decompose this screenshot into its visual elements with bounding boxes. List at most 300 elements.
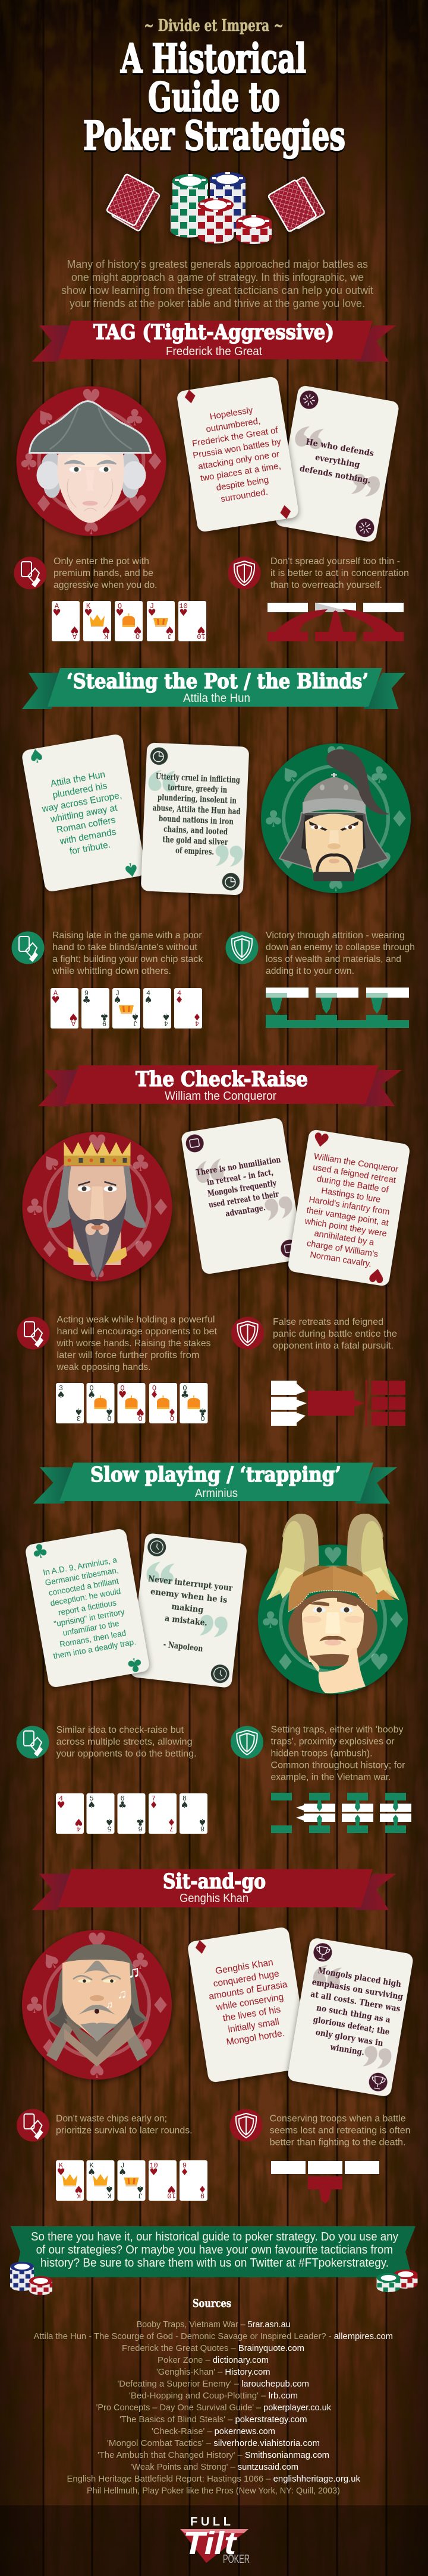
quote text: abuse, Attila the Hun had — [152, 803, 241, 817]
fact text — [37, 767, 131, 860]
poker hand: straight: 7 — [169, 1824, 174, 1833]
sources list: Poker Zone – dictionary.com — [158, 2355, 269, 2365]
tip text: stealing poker: a fight; building your own chip stack — [52, 954, 203, 964]
logo: Full Tilt Poker: Tilt — [183, 2526, 237, 2561]
poker hand: weak hand: A — [54, 989, 58, 998]
fact card: Genghis: ♦ — [191, 1935, 211, 1960]
fact text: while conserving — [215, 1992, 284, 2013]
poker hand: weak hand: J — [133, 1019, 137, 1027]
icon: quotation marks — [287, 424, 388, 499]
poker hand: high cards: ♠ — [136, 2183, 144, 2195]
portrait: Frederick the Great — [17, 385, 166, 539]
poker hand: straight: 5 — [89, 1795, 94, 1803]
quote card: Attila — [141, 742, 249, 895]
portrait: Attila the Hun: ♠ — [326, 871, 346, 897]
poker hand: four queens: Q — [152, 1384, 156, 1393]
tip text: stealing battle: adding it to your own. — [266, 966, 354, 976]
poker hand: straight: 6 — [120, 1795, 125, 1803]
tip text: sit-and-go poker — [56, 2114, 193, 2135]
icon: shield — [231, 1726, 263, 1759]
sources list: 'Pro Concepts – Day One Survival Guide' – pokerplayer.co.uk — [96, 2403, 331, 2413]
sources list: 'Weak Points and Strong' – suntzusaid.com — [131, 2462, 298, 2472]
sources heading: Sources — [193, 2297, 231, 2310]
fact card: Attila — [20, 730, 147, 896]
portrait: William the Conqueror: ♦ — [39, 1236, 60, 1262]
poker hand: weak hand: ♦ — [193, 1011, 202, 1023]
icon: right chip stacks — [377, 2270, 417, 2292]
icon: hand of cards — [17, 1726, 49, 1759]
poker hand: four queens: Q — [170, 1414, 174, 1422]
poker hand: weak hand: ♥ — [51, 994, 60, 1005]
tip text: sit-and-go battle: better than fighting to the death. — [270, 2138, 406, 2147]
portrait: Frederick the Great: ♦ — [144, 449, 165, 475]
portrait: William the Conqueror: ♣ — [130, 1150, 151, 1176]
section: Sit-and-go, Genghis Khan — [17, 1869, 414, 2204]
poker hand: weak hand: 4 — [177, 989, 181, 998]
sources list: 'Mongol Combat Tactics' – silverhorde.viahistoria.com — [107, 2438, 320, 2448]
icon: musical notes: ♫ — [128, 1963, 140, 1981]
tip text: sit-and-go battle — [270, 2114, 411, 2147]
poker hand: four queens: Q — [200, 1414, 205, 1422]
icon: card return — [184, 1121, 300, 1271]
portrait: Arminius — [258, 1514, 408, 1694]
quote text: defends nothing. — [299, 464, 372, 486]
fact text: concocted a brilliant — [48, 1577, 119, 1597]
tip text: check-raise battle: opponent into a fatal pursuit. — [273, 1341, 394, 1351]
fact text: with demands — [59, 827, 117, 847]
icon: quotation marks — [194, 1148, 294, 1231]
fact text: them into a deadly trap. — [52, 1637, 137, 1661]
fact text: William the Conqueror — [313, 1152, 399, 1175]
icon: pie chart — [144, 747, 246, 891]
poker hand: straight: ♦ — [167, 1817, 176, 1828]
poker hand: weak hand: J — [115, 989, 119, 998]
poker hand: royal flush: ♥ — [84, 607, 93, 618]
fact card: Frederick: ♦ — [180, 384, 200, 409]
portrait: Frederick the Great: ♣ — [18, 449, 39, 475]
portrait: Attila the Hun — [261, 742, 411, 897]
poker hand: four queens: ♠ — [56, 1389, 65, 1400]
fact text: Norman cavalry. — [309, 1251, 372, 1270]
quote text: plundering, insolent in — [158, 793, 237, 806]
tip text: check-raise poker: weak opposing hands. — [56, 1362, 151, 1372]
poker hand: high cards: 10 — [149, 2162, 158, 2170]
fact text: Mongol horde. — [226, 2028, 285, 2047]
poker hand: royal flush: 10 — [179, 602, 188, 610]
portrait: William the Conqueror: ♦ — [150, 1194, 171, 1220]
poker hand: royal flush: ♥ — [52, 607, 61, 618]
poker hand: royal flush: K — [103, 632, 108, 640]
portrait: Frederick the Great: ♠ — [29, 401, 61, 434]
quote text: only glory was in — [315, 2028, 384, 2049]
poker hand: weak hand: ♠ — [144, 994, 153, 1005]
tip text: stealing poker: while whittling down others. — [52, 966, 171, 976]
icon: left playing cards — [106, 174, 160, 232]
fact text: unfamiliar to the — [62, 1619, 120, 1638]
poker hand: royal flush: ♥ — [115, 607, 124, 618]
intro text: show how learning from these great tacticians can help you outwit — [61, 284, 373, 296]
poker hand: high cards: ♥ — [74, 2183, 83, 2195]
portrait: Attila the Hun: ♣ — [263, 806, 284, 832]
icon: quotation marks — [140, 1561, 234, 1638]
quote text: Never interrupt your — [147, 1574, 234, 1593]
banner: Slow playing — [33, 1463, 397, 1504]
poker hand: royal flush: J — [150, 602, 154, 610]
fact text: Germanic tribesman, — [45, 1566, 119, 1587]
poker hand: royal flush — [52, 601, 206, 641]
sources list: 'Genghis-Khan' – History.com — [156, 2367, 270, 2377]
banner: The Check-Raise: The Check-Raise — [136, 1067, 308, 1091]
sources list: 'Defeating a Superior Enemy' – larouchepub.com — [117, 2379, 309, 2389]
section: TAG, Frederick the Great — [14, 320, 409, 641]
icon: hand of cards — [17, 2109, 49, 2141]
quote card: William — [181, 1117, 304, 1275]
fact text: way across Europe, — [40, 790, 122, 814]
poker hand: weak hand: 4 — [164, 1019, 168, 1027]
poker hand: four queens: Q — [138, 1414, 143, 1422]
battle diagram: attrition — [266, 988, 409, 1028]
poker hand: royal flush: ♥ — [133, 624, 142, 635]
portrait: Genghis Khan: ♣ — [130, 1948, 150, 1974]
portrait: Arminius: ♦ — [275, 1649, 295, 1675]
poker hand: straight: ♠ — [180, 1799, 189, 1811]
section: Stealing the Pot, Attila the Hun — [12, 668, 415, 1028]
quote text: chains, and looted — [163, 825, 228, 837]
fact text: Harold's infantry from — [308, 1195, 391, 1217]
poker hand: four queens: Q — [182, 1384, 187, 1393]
fact text: Hopelessly — [209, 405, 254, 422]
title: Guide to — [148, 74, 280, 121]
quote text: There is no humiliation — [196, 1155, 282, 1178]
poker hand: high cards: ♠ — [105, 2183, 114, 2195]
poker hand: four queens: Q — [120, 1384, 125, 1393]
fact text: the lives of his — [222, 2005, 282, 2024]
tip text: slow playing battle: Setting traps, either with 'booby — [271, 1724, 403, 1735]
sources list: Booby Traps, Vietnam War – 5rar.asn.au — [137, 2319, 291, 2330]
icon: quotation marks — [300, 1963, 405, 2071]
portrait: Frederick the Great: ♠ — [81, 513, 102, 539]
tip text: stealing poker: hand to take blinds/ante's without — [52, 942, 198, 952]
fact text — [204, 1956, 296, 2049]
fact text — [187, 401, 289, 508]
banner: TAG — [32, 320, 396, 362]
footer band — [0, 2505, 428, 2576]
poker hand: royal flush: Q — [118, 602, 122, 610]
tip text: check-raise poker: hand will encourage opponents to bet — [57, 1327, 218, 1337]
sources list: English Heritage Battlefield Report: Hastings 1066 – englishheritage.org.uk — [67, 2474, 360, 2484]
poker hand: four queens: ♣ — [181, 1389, 189, 1400]
quote text: emphasis on surviving — [311, 1977, 404, 2002]
poker hand: high cards: ♠ — [118, 2166, 127, 2178]
fact text: plundered his — [52, 781, 108, 800]
fact text: for tribute. — [69, 840, 111, 857]
portrait: Frederick the Great: ♥ — [127, 490, 148, 517]
icon: clock — [133, 1537, 244, 1684]
tip text: check-raise poker — [56, 1315, 218, 1372]
fact text: Frederick the Great of — [191, 425, 279, 449]
fact card: Attila: ♠ — [26, 743, 47, 769]
quote text: the gold and silver — [162, 835, 228, 847]
fact text: which point they were — [304, 1216, 388, 1239]
poker hand: straight: 8 — [182, 1795, 187, 1803]
poker hand: high cards: K — [107, 2191, 112, 2200]
poker hand: royal flush: ♥ — [197, 624, 206, 635]
portrait: Arminius: ♥ — [369, 1649, 389, 1675]
fact text: Hastings to lure — [320, 1186, 381, 1205]
icon: hand of cards — [12, 931, 44, 964]
fact text: deception: he would — [49, 1587, 121, 1608]
fact text: outnumbered, — [205, 416, 261, 435]
poker hand: straight: ♦ — [149, 1799, 158, 1811]
tip text: check-raise battle: panic during battle entice the — [273, 1329, 397, 1339]
banner: Stealing the Pot: Attila the Hun — [183, 692, 250, 705]
tip text: stealing battle: down an enemy to collapse through — [266, 942, 415, 952]
quote text — [301, 1966, 406, 2062]
tip text: TAG battle — [270, 556, 409, 590]
poker hand: high cards: 10 — [167, 2191, 176, 2200]
fact text: two places at a time, — [200, 461, 282, 483]
poker hand: weak hand: ♦ — [175, 994, 184, 1005]
portrait: Attila the Hun: ♥ — [326, 742, 346, 768]
fact card: Frederick: ♦ — [275, 499, 295, 524]
quote text: winning. — [329, 2043, 365, 2058]
fact card: Arminius: ♣ — [124, 1652, 145, 1678]
tip text: stealing battle — [266, 931, 415, 976]
poker hand: four queens: ♠ — [105, 1406, 114, 1417]
portrait: Genghis Khan: ♦ — [39, 2034, 59, 2061]
sources list — [33, 2319, 393, 2496]
portrait: Frederick the Great: ♦ — [33, 490, 54, 517]
portrait: Genghis Khan: ♥ — [133, 2034, 153, 2061]
tip text: sit-and-go poker: prioritize survival to later rounds. — [56, 2126, 193, 2135]
quote text: of empires. — [175, 846, 214, 857]
portrait: Arminius: ♦ — [386, 1607, 407, 1633]
poker hand: straight — [56, 1793, 207, 1834]
intro text — [61, 258, 373, 309]
fact text: during the Battle of — [316, 1175, 389, 1195]
poker hand: high cards: K — [76, 2191, 81, 2200]
poker hand: four queens: ♠ — [87, 1389, 96, 1400]
quote text: advantage. — [225, 1203, 266, 1219]
poker hand: weak hand: ♣ — [82, 994, 91, 1005]
battle diagram: concentrated attack — [268, 603, 404, 641]
tip text: slow playing poker: across multiple streets, allowing — [56, 1737, 193, 1747]
logo: Full Tilt Poker — [180, 2515, 250, 2566]
poker hand: royal flush: Q — [136, 632, 140, 640]
logo: Full Tilt Poker: POKER — [223, 2553, 250, 2566]
portrait: Arminius: ♥ — [323, 1543, 343, 1569]
tip text: check-raise poker: Acting weak while holding a powerful — [57, 1315, 215, 1325]
portrait: William the Conqueror: ♠ — [35, 1147, 67, 1180]
tip text: stealing poker — [52, 931, 203, 976]
portrait: Frederick the Great: ♥ — [81, 385, 102, 411]
portrait: Frederick the Great: ♣ — [124, 405, 145, 431]
tip text: check-raise poker: with worse hands. Raising the stakes — [56, 1338, 210, 1349]
fact card: Genghis — [186, 1922, 311, 2087]
quote text: used retreat to their — [208, 1189, 280, 1210]
poker hand: royal flush: ♥ — [147, 607, 156, 618]
portrait: William the Conqueror: ♣ — [24, 1194, 45, 1220]
tip text: sit-and-go battle: Conserving troops when a battle — [270, 2114, 406, 2124]
icon: poker chip stacks — [171, 172, 272, 244]
quote text: a mistake. — [164, 1614, 208, 1628]
poker hand: four queens: 3 — [77, 1414, 81, 1422]
poker hand: weak hand: ♣ — [100, 1011, 109, 1023]
poker hand: royal flush: ♥ — [165, 624, 174, 635]
quote text: everything — [314, 453, 361, 470]
quote text — [299, 437, 376, 486]
portrait: Attila the Hun: ♥ — [372, 848, 392, 874]
icon: musical notes: ♫ — [117, 1986, 127, 2001]
tip text: slow playing battle: hidden troops (ambush). — [271, 1748, 372, 1759]
portrait: William the Conqueror: ♥ — [87, 1130, 108, 1156]
tip text: sit-and-go poker: Don't waste chips early on; — [56, 2114, 167, 2124]
fact card: William: ♥ — [311, 1128, 331, 1153]
quote card: Genghis — [287, 1937, 414, 2097]
sources list: 'The Basics of Blind Steals' – pokerstrategy.com — [119, 2414, 307, 2425]
poker hand: straight: ♠ — [198, 1817, 207, 1828]
fact card: Attila: ♠ — [121, 857, 141, 882]
fact card: Arminius — [24, 1525, 151, 1691]
tip text: stealing poker: Raising late in the game with a poor — [52, 931, 202, 941]
poker hand: straight: 5 — [107, 1824, 112, 1833]
tip text: check-raise battle — [273, 1317, 397, 1351]
quote text: making — [171, 1602, 204, 1615]
tip text: slow playing battle: traps', proximity explosives or — [271, 1736, 395, 1747]
portrait: Genghis Khan: ♠ — [35, 1945, 67, 1978]
fact card: Frederick — [175, 372, 300, 537]
banner: Sit-and-go — [32, 1869, 396, 1910]
poker hand: four queens: Q — [89, 1384, 94, 1393]
poker hand: high cards: 9 — [182, 2162, 187, 2170]
sources list: 'The Ambush that Changed History' – Smithsonianmag.com — [97, 2450, 329, 2460]
icon: shield — [231, 1317, 264, 1349]
sources list: 'Bed-Hopping and Coup-Plotting' – lrb.com — [129, 2391, 298, 2401]
portrait: Attila the Hun: ♦ — [278, 848, 298, 874]
quote text: torture, greedy in — [168, 783, 228, 795]
poker hand: weak hand: A — [71, 1019, 75, 1027]
poker hand: royal flush: K — [86, 602, 91, 610]
poker hand: straight: 4 — [59, 1795, 63, 1803]
quote text: in retreat – in fact, — [206, 1167, 274, 1188]
tip text: slow playing poker — [56, 1725, 197, 1759]
poker hand: high cards: ♦ — [198, 2183, 207, 2195]
fact text: Roman coffers — [56, 815, 117, 836]
poker hand: straight: 6 — [138, 1824, 143, 1833]
tip text: TAG battle: than to overreach yourself. — [270, 580, 382, 590]
fact text: "uprising" in territory — [53, 1607, 125, 1629]
portrait: William the Conqueror: ♥ — [133, 1236, 154, 1262]
banner: Sit-and-go: Genghis Khan — [180, 1892, 248, 1905]
tip text: TAG battle: it is better to act in concentration — [270, 568, 409, 578]
banner: The Check-Raise — [38, 1065, 402, 1106]
tip text: stealing battle: loss of wealth and materials, and — [266, 954, 401, 964]
poker hand: four queens — [56, 1383, 208, 1423]
poker hand: four queens: ♠ — [74, 1406, 83, 1417]
quote text: at all costs. There was — [310, 1990, 401, 2014]
icon: hand of cards — [14, 557, 46, 589]
quote text: bound nations in iron — [159, 814, 234, 827]
tip text: sit-and-go battle: seems lost and retreating is often — [270, 2126, 411, 2135]
battle diagram: retreat — [271, 2161, 379, 2204]
quote card: Frederick — [274, 385, 400, 543]
quote text: Utterly cruel in inflicting — [156, 772, 241, 785]
tip text: TAG poker: aggressive when you do. — [54, 580, 157, 590]
tagline: ~ Divide et Impera ~ — [144, 17, 284, 35]
fact text: report a fictitious — [58, 1598, 117, 1617]
poker hand: weak hand: ♠ — [113, 994, 122, 1005]
poker hand: straight: ♥ — [56, 1799, 65, 1811]
portrait: Attila the Hun: ♣ — [369, 762, 389, 788]
fact text: despite being — [215, 475, 269, 493]
icon: quotation marks — [145, 770, 246, 868]
portrait: William the Conqueror — [23, 1130, 172, 1285]
intro text: your friends at the poker table and thrive at the game you love. — [70, 298, 365, 309]
icon: hand of cards — [17, 1317, 50, 1349]
quote text: glorious defeat; the — [313, 2015, 391, 2037]
icon: shield — [226, 931, 258, 964]
portrait: Genghis Khan: ♥ — [87, 1928, 107, 1954]
portrait: Attila the Hun: ♠ — [274, 758, 306, 792]
header — [61, 17, 373, 309]
poker hand: high cards: ♦ — [180, 2166, 189, 2178]
poker hand: four queens: ♦ — [150, 1389, 159, 1400]
poker hand: weak hand: 9 — [84, 989, 89, 998]
poker hand: weak hand: 4 — [146, 989, 150, 998]
tip text: slow playing poker: Similar idea to check-raise but — [56, 1725, 184, 1735]
fact text: used a feigned retreat — [312, 1163, 396, 1185]
poker hand: straight: 4 — [77, 1824, 81, 1833]
icon: shield — [229, 2109, 263, 2141]
poker hand: four queens: Q — [107, 1414, 112, 1422]
fact text: amounts of Eurasia — [208, 1979, 288, 2002]
banner: TAG: Frederick the Great — [166, 345, 262, 358]
icon: trophy — [292, 1942, 408, 2093]
poker hand: weak hand — [51, 988, 202, 1028]
banner: Stealing the Pot: ‘Stealing the Pot / the Blinds’ — [67, 669, 369, 694]
closing banner: of our strategies? Or maybe you have your own favourite tacticians from — [36, 2243, 393, 2257]
tip text: stealing battle: Victory through attrition - wearing — [266, 931, 405, 941]
quote text: - Napoleon — [163, 1640, 203, 1654]
quote text — [150, 772, 243, 858]
poker hand: weak hand: ♠ — [162, 1011, 171, 1023]
fact text: Prussia won battles by — [192, 436, 282, 461]
banner: Slow playing: Arminius — [195, 1487, 238, 1500]
closing banner: history? Be sure to share them with us on Twitter at #FTpokerstrategy. — [40, 2257, 389, 2270]
battle diagram: false retreat — [271, 1380, 405, 1426]
poker hand: high cards: K — [89, 2162, 94, 2170]
banner: The Check-Raise: William the Conqueror — [165, 1090, 276, 1103]
portrait: Genghis Khan: ♠ — [87, 2057, 107, 2083]
poker hand: high cards: J — [120, 2162, 125, 2170]
fact text: Attila the Hun — [50, 770, 106, 789]
poker hand: weak hand: 9 — [102, 1019, 106, 1027]
banner: Slow playing: Slow playing / ‘trapping’ — [90, 1463, 341, 1487]
poker hand: high cards: K — [59, 2162, 64, 2170]
fact text: their vantage point, at — [306, 1205, 389, 1228]
quote text: enemy when he is — [150, 1587, 228, 1605]
poker hand: four queens: ♥ — [118, 1389, 127, 1400]
poker hand: straight: ♠ — [87, 1799, 96, 1811]
icon: right playing cards — [268, 176, 325, 232]
poker hand: straight: ♠ — [105, 1817, 114, 1828]
fact text: Romans, then lead — [59, 1628, 127, 1649]
poker hand: straight: ♥ — [74, 1817, 83, 1828]
poker hand: royal flush: J — [168, 632, 172, 640]
section: The Check-Raise, William the Conqueror — [17, 1065, 411, 1426]
poker hand: straight: ♣ — [136, 1817, 144, 1828]
poker hand: royal flush: ♥ — [179, 607, 188, 618]
